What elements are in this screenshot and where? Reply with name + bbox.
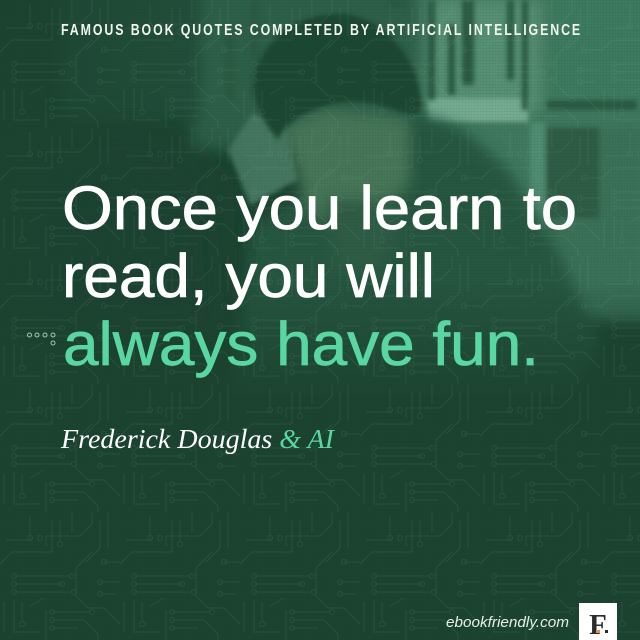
bright wall patch and picture frame	[428, 98, 599, 232]
quote line 2: read, you will	[62, 242, 435, 310]
website: ebookfriendly.com	[446, 614, 569, 631]
quote line 3, AI completion: always have fun.	[63, 310, 539, 378]
icon: circuit nodes	[28, 333, 55, 345]
bookshelf strokes	[225, 0, 637, 110]
left fade	[0, 0, 220, 400]
lower fade	[0, 280, 640, 400]
room wall	[60, 0, 640, 320]
man's hair	[254, 14, 421, 140]
shoulder at left, dark	[0, 130, 225, 360]
quote line 1: Once you learn to	[62, 174, 577, 242]
man's beard	[325, 200, 405, 275]
man's torso	[230, 112, 600, 420]
man's face	[285, 110, 410, 225]
attribution: Frederick Douglas & AI	[60, 424, 336, 454]
series heading: FAMOUS BOOK QUOTES COMPLETED BY ARTIFICIAL INTELLIGENCE	[61, 21, 580, 38]
shirt collar	[228, 114, 298, 205]
logo	[579, 603, 617, 640]
quote	[62, 174, 577, 378]
